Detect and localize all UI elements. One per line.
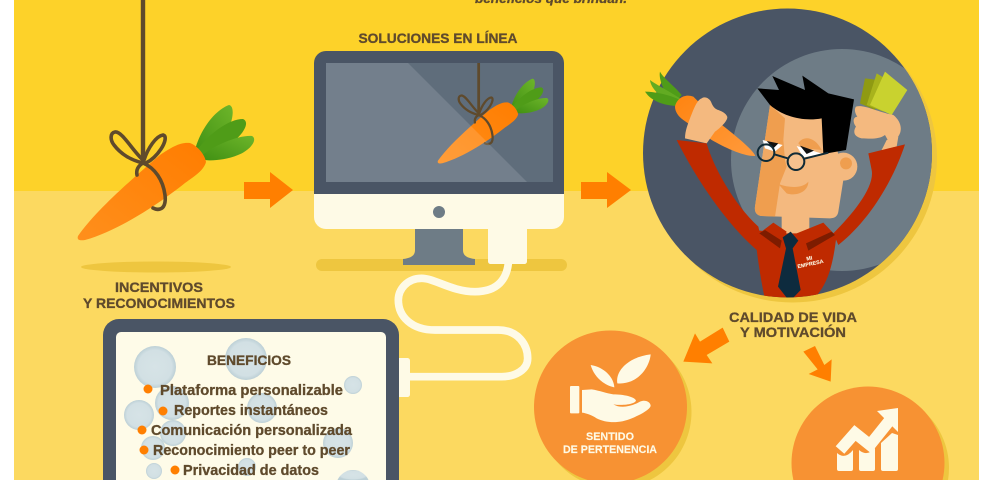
label: calidad de vida y motivacion: Y MOTIVACIÓN xyxy=(740,323,846,340)
panel: tablet beneficios xyxy=(103,319,399,480)
neck xyxy=(782,210,809,237)
label: calidad de vida y motivacion xyxy=(729,309,857,340)
cable from monitor to tablet xyxy=(398,263,528,377)
label: incentivos y reconocimientos xyxy=(83,279,235,311)
ear xyxy=(829,153,857,181)
money xyxy=(860,72,907,115)
right arm xyxy=(833,144,905,245)
arrow: to sentido de pertenencia xyxy=(683,328,729,363)
arrow: carrot to monitor xyxy=(244,172,293,208)
monitor desk shadow xyxy=(316,259,567,271)
carrot on screen xyxy=(438,63,548,164)
list: beneficios: Plataforma personalizable xyxy=(160,383,343,399)
bubbles xyxy=(124,338,368,480)
monitor cable plug xyxy=(488,226,527,264)
label: sentido de pertenencia: SENTIDO xyxy=(586,431,634,443)
collar xyxy=(762,222,787,234)
shirt logo xyxy=(796,253,824,270)
person illustration xyxy=(645,72,907,300)
tie xyxy=(778,232,801,298)
shirt xyxy=(755,223,837,300)
circle: sentido de pertenencia xyxy=(534,331,691,480)
monitor xyxy=(314,51,564,265)
monitor screen xyxy=(326,63,553,182)
left arm xyxy=(677,140,765,257)
label: incentivos y reconocimientos: INCENTIVOS xyxy=(115,279,203,295)
monitor power button xyxy=(433,206,445,218)
label: calidad de vida y motivacion: CALIDAD DE VIDA xyxy=(729,309,857,325)
monitor stand xyxy=(403,229,475,265)
inner light circle xyxy=(731,49,953,271)
icon: hand with sprout xyxy=(570,354,651,422)
icon: growth chart xyxy=(837,408,898,471)
background: upper yellow band xyxy=(14,0,979,192)
background: lower yellow band xyxy=(14,191,979,480)
list: beneficios: Comunicación personalizada xyxy=(151,423,353,439)
person circle background xyxy=(643,8,932,298)
hair xyxy=(757,76,854,154)
hanging carrot on a string xyxy=(78,0,254,240)
circle: growth xyxy=(792,387,949,480)
list: beneficios: Reportes instantáneos xyxy=(174,403,328,419)
shirt logo: MI xyxy=(806,255,813,263)
monitor chin xyxy=(314,190,564,229)
monitor frame xyxy=(314,51,564,194)
tablet screen xyxy=(116,332,386,480)
eyes xyxy=(763,140,783,152)
label: sentido de pertenencia: DE PERTENENCIA xyxy=(563,444,657,456)
tablet plug xyxy=(395,358,410,397)
face xyxy=(755,105,843,218)
list: beneficios: Privacidad de datos xyxy=(183,463,319,479)
person circle shadow xyxy=(648,14,937,302)
screen glare xyxy=(326,63,527,182)
list: beneficios xyxy=(138,383,353,479)
left hand xyxy=(685,97,727,143)
carrot shadow xyxy=(81,262,231,272)
arrow: to growth circle xyxy=(803,346,832,382)
label: incentivos y reconocimientos: Y RECONOCIMIENTOS xyxy=(83,295,235,311)
arrow: monitor to person xyxy=(581,172,631,208)
tablet frame xyxy=(103,319,399,480)
right hand xyxy=(854,106,901,150)
list: beneficios: Reconocimiento peer to peer xyxy=(153,443,350,459)
label: sentido de pertenencia xyxy=(563,431,657,456)
face shadow xyxy=(755,105,787,217)
glasses xyxy=(758,144,828,170)
heading: soluciones en linea: SOLUCIONES EN LÍNEA xyxy=(358,30,518,46)
heading: beneficios: BENEFICIOS xyxy=(207,352,291,368)
held carrot xyxy=(645,72,755,156)
smile xyxy=(778,182,808,194)
shirt logo: EMPRESA xyxy=(797,259,824,270)
